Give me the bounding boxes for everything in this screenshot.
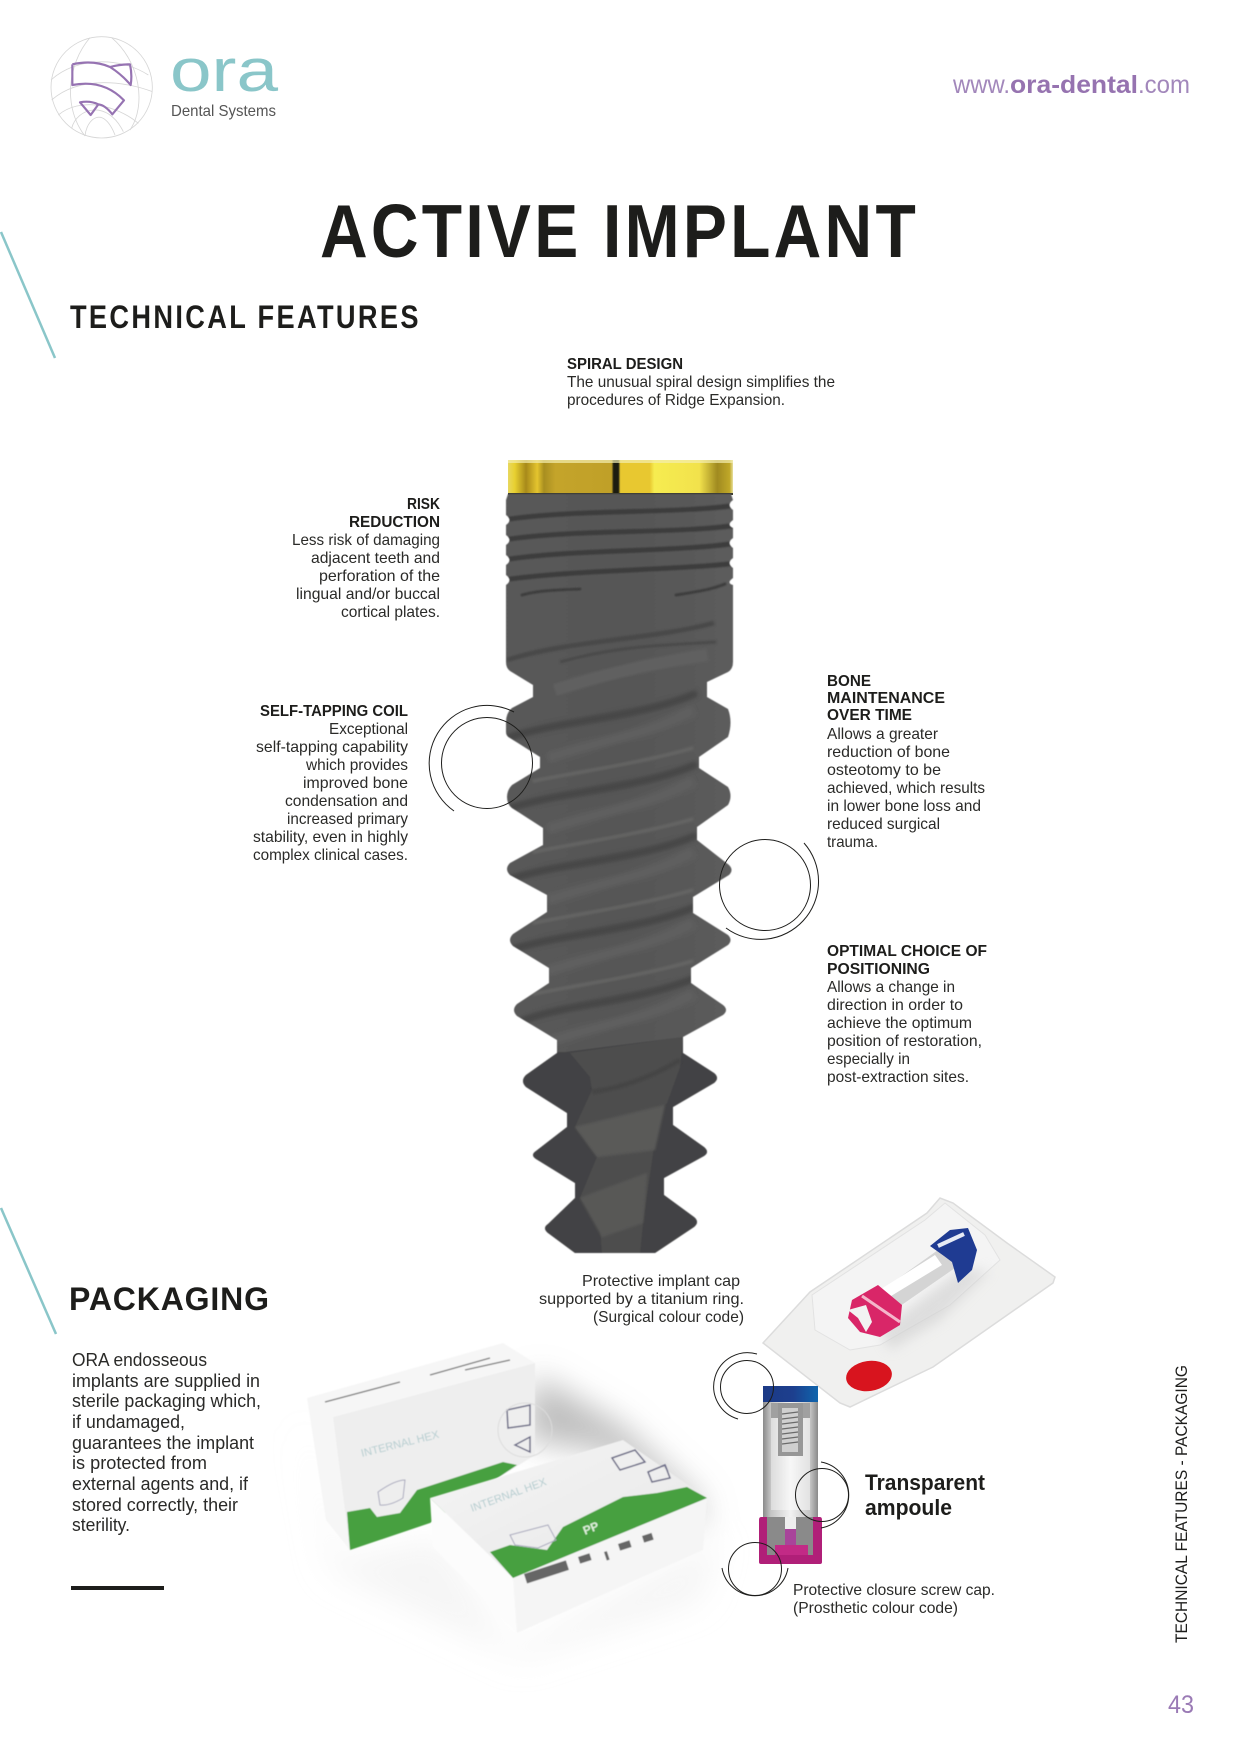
callout circle: implant cap <box>714 1353 774 1419</box>
text block: bone maintenance: MAINTENANCE <box>827 690 945 707</box>
back box <box>307 1343 552 1550</box>
text block: self-tapping coil: stability, even in highly <box>253 829 408 846</box>
text block: protective implant cap <box>539 1273 744 1326</box>
text block: packaging description: sterile packaging which, <box>72 1391 261 1411</box>
text block: risk reduction: REDUCTION <box>349 514 440 531</box>
ampoule blue cap <box>763 1386 818 1402</box>
text block: self-tapping coil: condensation and <box>285 793 408 810</box>
front box: INTERNAL HEX <box>469 1476 549 1515</box>
blister tray <box>763 1198 1055 1407</box>
ampoule diagram <box>759 1386 822 1564</box>
logo <box>51 37 279 138</box>
divider bar <box>71 1586 164 1590</box>
box shadow <box>300 1375 720 1660</box>
text block: risk reduction: cortical plates. <box>341 604 440 621</box>
text block: bone maintenance <box>827 673 985 851</box>
text block: risk reduction: lingual and/or buccal <box>296 586 440 603</box>
front box: PP <box>581 1519 601 1538</box>
magenta closure cap <box>759 1517 822 1564</box>
text block: spiral design: procedures of Ridge Expansion. <box>567 392 785 409</box>
text block: packaging description: guarantees the implant <box>72 1433 254 1453</box>
icon: globe with tooth mark <box>51 37 152 138</box>
text block: bone maintenance: achieved, which results <box>827 780 985 797</box>
spiral thread shading <box>507 693 697 1042</box>
text block: optimal choice of positioning: achieve the optimum <box>827 1015 972 1032</box>
text block: spiral design <box>567 356 835 409</box>
text block: self-tapping coil <box>253 703 408 864</box>
text block: optimal choice of positioning: position of restoration, <box>827 1033 982 1050</box>
pink end cap <box>848 1285 902 1337</box>
text block: bone maintenance: Allows a greater <box>827 726 939 743</box>
label: transparent ampoule <box>865 1470 986 1520</box>
text block: packaging description: ORA endosseous <box>72 1350 207 1370</box>
text block: optimal choice of positioning: Allows a change in <box>827 979 955 996</box>
collar threads <box>503 505 737 595</box>
text block: optimal choice of positioning: especially in <box>827 1051 910 1068</box>
text block: self-tapping coil: increased primary <box>287 811 408 828</box>
callout circle: closure cap <box>722 1542 788 1596</box>
blister pack <box>763 1198 1055 1407</box>
title: ACTIVE IMPLANT <box>320 189 916 273</box>
label: transparent ampoule: ampoule <box>865 1495 952 1520</box>
text block: bone maintenance: OVER TIME <box>827 707 912 724</box>
text block: spiral design: The unusual spiral design simplifies the <box>567 374 835 391</box>
text block: bone maintenance: trauma. <box>827 834 878 851</box>
text block: risk reduction: RISK <box>407 496 441 513</box>
tube shadow <box>880 1270 990 1350</box>
text block: self-tapping coil: complex clinical cases. <box>253 847 408 864</box>
text block: packaging description: external agents and, if <box>72 1474 249 1494</box>
text block: risk reduction: Less risk of damaging <box>292 532 440 549</box>
text block: optimal choice of positioning: OPTIMAL CHOICE OF <box>827 943 987 960</box>
text block: packaging description: implants are supplied in <box>72 1371 260 1391</box>
accent line: technical features <box>1 232 55 358</box>
text block: spiral design: SPIRAL DESIGN <box>567 356 683 373</box>
text block: protective implant cap: supported by a titanium ring. <box>539 1291 744 1308</box>
callout circle: bone maintenance <box>720 840 819 939</box>
text block: optimal choice of positioning: direction in order to <box>827 997 963 1014</box>
back box: INTERNAL HEX <box>360 1429 441 1460</box>
accent line: packaging <box>1 1208 56 1334</box>
heading: packaging: PACKAGING <box>69 1281 269 1317</box>
text block: risk reduction: perforation of the <box>319 568 440 585</box>
page number: 43 <box>1168 1691 1194 1719</box>
implant threaded body <box>500 490 740 1260</box>
text block: packaging description: if undamaged, <box>72 1412 185 1432</box>
text block: optimal choice of positioning <box>827 943 987 1086</box>
text block: packaging description <box>72 1350 261 1535</box>
ampoule chamber <box>771 1418 810 1510</box>
text block: self-tapping coil: SELF-TAPPING COIL <box>260 703 408 720</box>
side section label: TECHNICAL FEATURES - PACKAGING <box>1173 1365 1191 1643</box>
blister dome <box>812 1203 1000 1350</box>
mini implant <box>771 1403 810 1456</box>
text block: self-tapping coil: Exceptional <box>329 721 408 738</box>
text block: protective implant cap: (Surgical colour code) <box>593 1309 744 1326</box>
text block: protective implant cap: Protective implant cap <box>582 1273 740 1290</box>
callout circle: self-tapping coil <box>429 705 532 811</box>
website url: ora-dental <box>1010 71 1138 99</box>
text block: self-tapping coil: self-tapping capability <box>256 739 408 756</box>
website url <box>952 71 1190 99</box>
text block: bone maintenance: reduction of bone <box>827 744 950 761</box>
callout circle: transparent ampoule <box>796 1462 849 1528</box>
text block: packaging description: sterility. <box>72 1515 130 1535</box>
text block: optimal choice of positioning: post-extraction sites. <box>827 1069 969 1086</box>
text block: self-tapping coil: improved bone <box>303 775 408 792</box>
heading: technical features: TECHNICAL FEATURES <box>70 300 418 336</box>
implant illustration <box>500 460 740 1260</box>
text block: bone maintenance: in lower bone loss and <box>827 798 981 815</box>
implant gold collar <box>508 460 733 495</box>
logo wordmark: ora <box>170 37 279 104</box>
text block: optimal choice of positioning: POSITIONING <box>827 961 930 978</box>
ampoule body <box>763 1402 818 1518</box>
text block: protective closure screw cap: (Prosthetic colour code) <box>793 1600 958 1617</box>
text block: bone maintenance: BONE <box>827 673 871 690</box>
inner tube <box>868 1245 955 1320</box>
collar lower spiral <box>507 623 716 690</box>
text block: risk reduction <box>292 496 441 621</box>
apical cutting wings <box>522 1038 718 1254</box>
text block: protective closure screw cap <box>793 1582 995 1617</box>
red seal <box>844 1358 894 1394</box>
text block: bone maintenance: osteotomy to be <box>827 762 941 779</box>
text block: bone maintenance: reduced surgical <box>827 816 940 833</box>
label: transparent ampoule: Transparent <box>865 1470 986 1495</box>
blue end cap <box>930 1228 977 1283</box>
website url: .com <box>1138 71 1190 99</box>
logo tagline: Dental Systems <box>171 103 276 120</box>
text block: risk reduction: adjacent teeth and <box>311 550 440 567</box>
text block: packaging description: stored correctly, their <box>72 1495 238 1515</box>
website url: www. <box>952 71 1010 99</box>
packaging boxes <box>300 1343 720 1660</box>
text block: self-tapping coil: which provides <box>305 757 408 774</box>
text block: protective closure screw cap: Protective closure screw cap. <box>793 1582 995 1599</box>
text block: packaging description: is protected from <box>72 1453 207 1473</box>
front box <box>430 1440 707 1633</box>
